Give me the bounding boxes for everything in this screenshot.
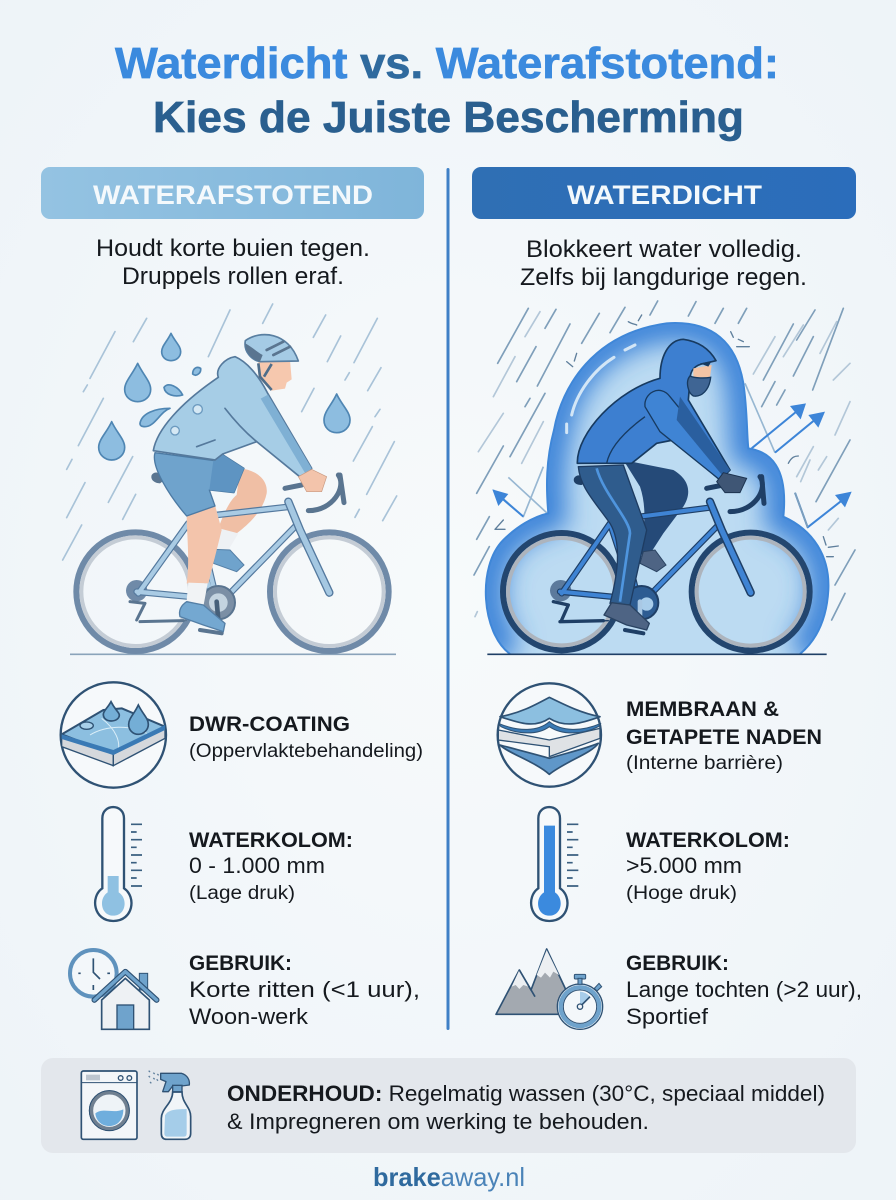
jacket — [153, 357, 312, 478]
glove — [717, 473, 747, 493]
text: waterkolom low: (Lage druk) — [189, 883, 295, 904]
header: waterafstotend: WATERAFSTOTEND — [93, 180, 373, 210]
handlebar — [707, 477, 764, 512]
wheels — [76, 532, 389, 651]
text: waterkolom high: WATERKOLOM: — [626, 829, 790, 852]
header: waterafstotend — [41, 167, 424, 219]
text: waterafstotend description — [96, 235, 370, 290]
text: waterkolom low: 0 - 1.000 mm — [189, 853, 325, 878]
near leg — [187, 505, 222, 583]
text: onderhoud: ONDERHOUD: Regelmatig wassen (30°C, speciaal middel) — [227, 1081, 825, 1106]
row: gebruik long — [496, 949, 862, 1029]
footer: brand: brakeaway.nl — [373, 1162, 525, 1192]
saddle — [151, 473, 167, 483]
rain — [474, 301, 855, 620]
text: waterkolom high: >5.000 mm — [626, 853, 742, 878]
text: membraan — [626, 698, 822, 774]
hand — [298, 469, 327, 492]
text: waterkolom high — [626, 829, 790, 904]
text: gebruik long: Lange tochten (>2 uur), — [626, 977, 862, 1002]
text: gebruik long: GEBRUIK: — [626, 952, 729, 975]
arrows — [492, 383, 852, 527]
text: membraan: (Interne barrière) — [626, 753, 783, 774]
text: dwr coating: (Oppervlaktebehandeling) — [189, 741, 423, 762]
text: dwr coating — [189, 713, 423, 762]
text: waterkolom high: (Hoge druk) — [626, 883, 737, 904]
icon: washing machine — [81, 1071, 137, 1139]
row: dwr coating — [61, 682, 423, 788]
text: waterkolom low: WATERKOLOM: — [189, 829, 353, 852]
row: gebruik short — [70, 950, 420, 1029]
text: membraan: MEMBRAAN & — [626, 698, 779, 721]
wheels — [503, 533, 810, 651]
ground — [70, 652, 396, 657]
icon: dwr fabric — [61, 682, 166, 788]
row: waterkolom low — [95, 807, 353, 921]
row: waterkolom high — [531, 807, 790, 921]
text: waterkolom low — [189, 829, 353, 904]
face and mask — [693, 365, 712, 377]
far leg — [217, 468, 267, 533]
bicycle frame — [126, 502, 329, 633]
text: onderhoud: & Impregneren om werking te behouden. — [227, 1109, 649, 1134]
text: gebruik short: Woon-werk — [189, 1004, 309, 1029]
panel: waterdicht — [472, 167, 862, 1029]
divider — [446, 168, 450, 1030]
bubble highlights — [567, 345, 635, 433]
near leg — [578, 465, 647, 605]
text: gebruik short: GEBRUIK: — [189, 952, 292, 975]
bicycle frame — [550, 502, 751, 633]
text: gebruik long — [626, 952, 862, 1029]
text: waterdicht description: Blokkeert water volledig. — [526, 236, 802, 263]
saddle — [574, 475, 588, 485]
text: waterdicht description — [520, 236, 807, 291]
text: gebruik short — [189, 952, 420, 1029]
rain — [63, 304, 397, 560]
water splashes — [495, 315, 838, 557]
text: waterafstotend description: Druppels rollen eraf. — [122, 263, 344, 290]
water drops — [99, 333, 350, 460]
panel: waterafstotend — [41, 167, 424, 1029]
jacket and hood — [577, 339, 730, 480]
title: Waterdicht vs. Waterafstotend: — [115, 39, 779, 88]
icon: clock and house — [70, 950, 157, 1029]
icon: thermometer high — [531, 807, 578, 921]
far leg — [623, 460, 688, 557]
handlebar — [285, 475, 344, 511]
text: waterdicht description: Zelfs bij langdurige regen. — [520, 264, 807, 291]
text: waterafstotend description: Houdt korte buien tegen. — [96, 235, 370, 262]
shorts — [154, 453, 244, 516]
illustration: cyclist with water repellent jacket — [63, 304, 397, 654]
icon: spray bottle — [149, 1071, 191, 1139]
header: waterdicht — [472, 167, 856, 219]
text: membraan: GETAPETE NADEN — [626, 726, 822, 749]
title — [115, 39, 779, 142]
row: membraan — [498, 683, 822, 787]
title: Kies de Juiste Bescherming — [153, 93, 744, 142]
text: dwr coating: DWR-COATING — [189, 713, 350, 736]
ground — [487, 652, 827, 657]
illustration: cyclist in waterproof bubble — [474, 301, 855, 654]
helmet — [245, 335, 298, 362]
icon: membrane layers — [498, 683, 601, 787]
water shield bubble — [486, 323, 828, 654]
header: waterdicht: WATERDICHT — [567, 180, 763, 210]
text: onderhoud — [227, 1081, 825, 1134]
text: gebruik long: Sportief — [626, 1004, 709, 1029]
head — [258, 360, 292, 391]
icon: mountains and stopwatch — [496, 949, 603, 1029]
panel: onderhoud — [41, 1058, 856, 1153]
text: gebruik short: Korte ritten (<1 uur), — [189, 977, 420, 1002]
icon: thermometer low — [95, 807, 142, 921]
